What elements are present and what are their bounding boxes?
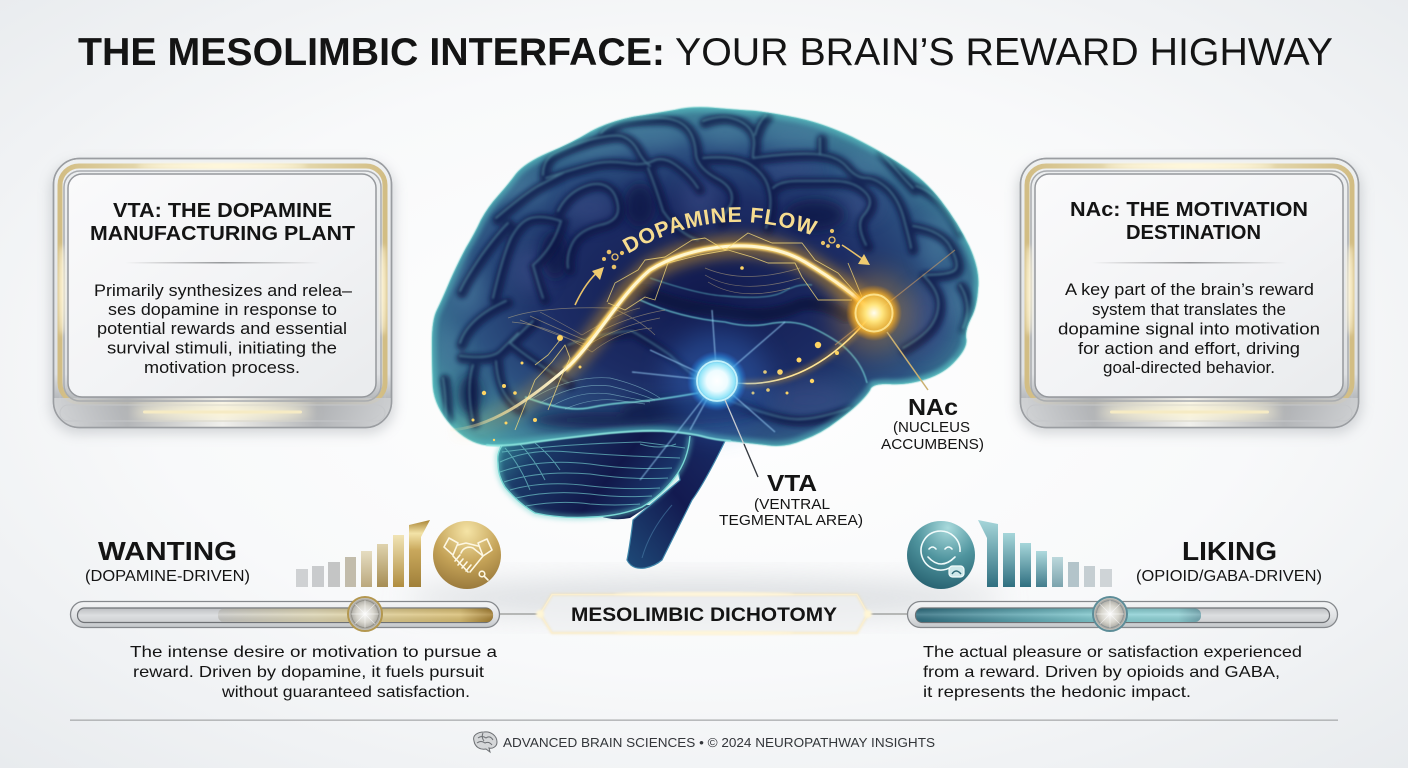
text: NAc description: for action and effort, driving: [1078, 340, 1300, 358]
shadow beneath brain: [405, 578, 1005, 618]
footer rule: [70, 720, 1338, 721]
title: [78, 31, 1333, 74]
icon: arrow into flow: [575, 250, 624, 305]
lightning arcs: [515, 233, 862, 430]
temporal lobe and limbic band: [525, 278, 956, 409]
heading: wanting: (DOPAMINE-DRIVEN): [85, 568, 250, 585]
brain illustration: [430, 106, 980, 569]
signal mesh: [508, 268, 800, 352]
connector: right: [868, 613, 907, 615]
slider knob: [1093, 597, 1127, 631]
teal lower rim: [486, 431, 731, 446]
text: wanting description: [130, 644, 497, 701]
icon: teal arrow: [978, 520, 998, 587]
heading: NAc card: [1070, 198, 1308, 244]
connector: left: [500, 613, 540, 615]
heading: NAc card: DESTINATION: [1126, 221, 1261, 244]
text: liking description: it represents the hedonic impact.: [923, 684, 1191, 701]
icon: footer brain: [474, 732, 497, 752]
title: THE MESOLIMBIC INTERFACE:: [78, 31, 665, 74]
heading: NAc card: NAc: THE MOTIVATION: [1070, 198, 1308, 221]
heading: VTA card: VTA: THE DOPAMINE: [113, 199, 332, 222]
label: VTA: VTA: [767, 470, 817, 496]
footer text: ADVANCED BRAIN SCIENCES • © 2024 NEUROPATHWAY INSIGHTS: [503, 735, 935, 750]
text: liking description: [923, 644, 1302, 701]
brainstem: [627, 420, 735, 568]
heading: VTA card: MANUFACTURING PLANT: [90, 222, 355, 245]
text: NAc description: dopamine signal into motivation: [1058, 320, 1320, 338]
heading: VTA card: [90, 199, 355, 245]
title: YOUR BRAIN’S REWARD HIGHWAY: [675, 31, 1333, 74]
dopamine pathway: [450, 233, 873, 441]
cerebellum: [498, 420, 692, 519]
text: VTA description: motivation process.: [144, 359, 300, 377]
heading: liking: (OPIOID/GABA-DRIVEN): [1136, 568, 1322, 585]
label: VTA: TEGMENTAL AREA): [719, 513, 863, 529]
heading: wanting: [85, 536, 250, 585]
icon: arrow out of flow: [821, 229, 870, 265]
label: NAc: NAc: [908, 394, 958, 420]
panel: VTA card: [50, 158, 395, 434]
text: VTA description: Primarily synthesizes and relea–: [94, 282, 353, 300]
banner: mesolimbic dichotomy: MESOLIMBIC DICHOTOMY: [571, 604, 837, 626]
label: dopamine flow: DOPAMINE FLOW: [622, 207, 818, 254]
deep grooves: [445, 117, 969, 423]
icon: teal smile badge: [907, 521, 975, 589]
text: VTA description: potential rewards and essential: [97, 320, 347, 338]
gyri shading: [432, 107, 978, 446]
text: liking description: from a reward. Driven by opioids and GABA,: [923, 664, 1280, 681]
text: wanting description: The intense desire or motivation to pursue a: [130, 644, 497, 661]
dopamine particles: [472, 266, 839, 441]
heading: liking: [1136, 536, 1322, 585]
text: VTA description: [94, 282, 353, 377]
heading: wanting: WANTING: [98, 536, 237, 566]
text: liking description: The actual pleasure or satisfaction experienced: [923, 644, 1302, 661]
text: NAc description: system that translates the: [1092, 301, 1286, 319]
text: wanting description: reward. Driven by dopamine, it fuels pursuit: [133, 664, 485, 681]
node: NAc glow: [834, 250, 955, 353]
cerebrum: [432, 107, 978, 446]
node: VTA glow: [632, 310, 785, 480]
label: NAc: [881, 332, 984, 453]
label: VTA: [719, 400, 863, 529]
heading: liking: LIKING: [1182, 536, 1277, 566]
label: NAc: (NUCLEUS: [893, 420, 970, 436]
text: VTA description: ses dopamine in response to: [108, 301, 337, 319]
slider: liking: [908, 597, 1338, 631]
cerebellum folds: [500, 442, 685, 506]
text: NAc description: [1058, 281, 1320, 377]
text: VTA description: survival stimuli, initiating the: [107, 340, 337, 358]
slider: wanting: [70, 597, 500, 631]
label: VTA: (VENTRAL: [754, 497, 830, 513]
chart: falling teal bars: [978, 520, 1112, 587]
text: NAc description: goal-directed behavior.: [1103, 359, 1275, 377]
label: NAc: ACCUMBENS): [881, 437, 984, 453]
panel: NAc card: [1017, 158, 1362, 434]
icon: gold handshake badge: [433, 521, 501, 589]
text: wanting description: without guaranteed satisfaction.: [221, 684, 470, 701]
text: NAc description: A key part of the brain’s reward: [1065, 281, 1314, 299]
slider knob: [348, 597, 382, 631]
chart: rising gold bars: [296, 520, 430, 587]
banner: mesolimbic dichotomy: [536, 592, 872, 635]
icon: gold arrow: [409, 520, 430, 587]
